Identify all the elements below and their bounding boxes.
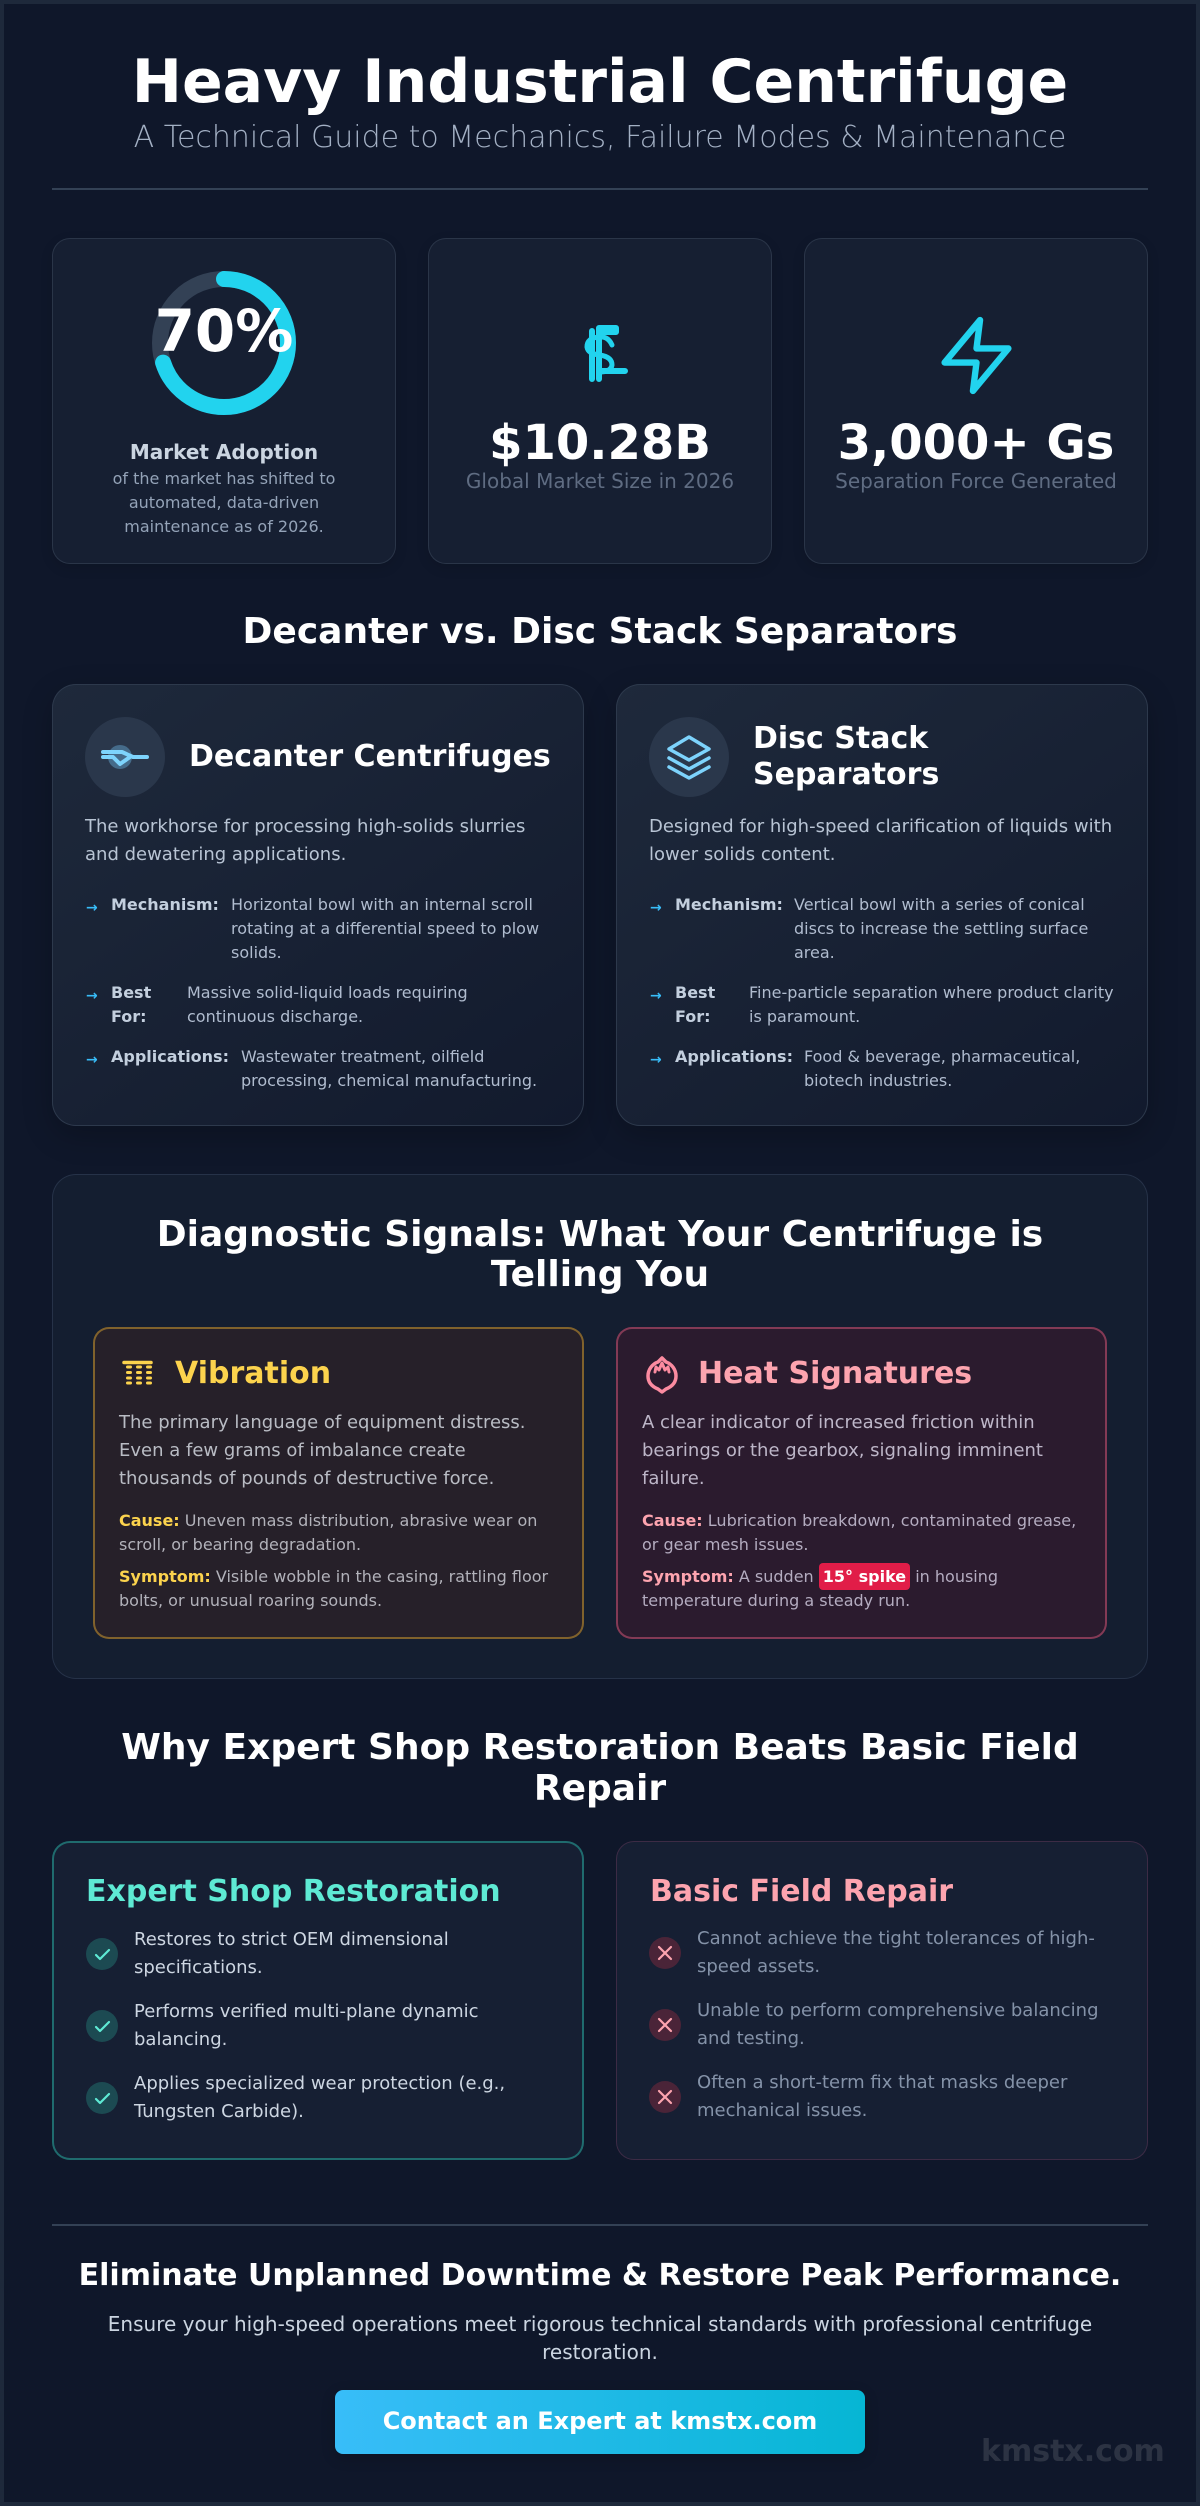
item text: Cannot achieve the tight tolerances of high- [697,1928,1095,1949]
arrow: → [86,900,98,916]
best for label: Best [675,983,715,1002]
best for label: For: [111,1007,147,1026]
watermark: kmstx.com [981,2434,1165,2469]
icon: cross [649,1937,681,1969]
stat description: of the market has shifted to [113,469,335,488]
stat value: 70%: 70% [155,297,293,365]
stat heading: Market Adoption [130,440,318,464]
item text: Restores to strict OEM dimensional [134,1929,449,1950]
applications text [241,1047,537,1090]
card description: and dewatering applications. [85,844,346,865]
best for label [675,983,715,1026]
best for text: continuous discharge. [187,1007,363,1026]
best for text: Massive solid-liquid loads requiring [187,983,468,1002]
item text: balancing. [134,2029,227,2050]
mechanism label: Mechanism: [675,895,783,914]
applications text: Wastewater treatment, oilfield [241,1047,484,1066]
card description: failure. [642,1468,705,1489]
cause: or gear mesh issues. [642,1535,808,1554]
cause [642,1511,1076,1554]
icon: vibration [122,1360,153,1384]
call to action text: Ensure your high-speed operations meet rigorous technical standards with professional centrifuge [108,2312,1092,2336]
heading: comparison: Decanter vs. Disc Stack Separators [243,611,957,652]
applications text: processing, chemical manufacturing. [241,1071,537,1090]
icon: flame [646,1356,678,1394]
symptom with highlight: temperature during a steady run. [642,1591,910,1610]
mechanism text: Horizontal bowl with an internal scroll [231,895,533,914]
icon: disc stack [649,717,729,797]
stat description: maintenance as of 2026. [124,517,324,536]
card: heat signatures [616,1327,1107,1639]
applications label: Applications: [675,1047,793,1066]
symptom: Symptom: Visible wobble in the casing, rattling floor [119,1567,548,1586]
symptom: bolts, or unusual roaring sounds. [119,1591,382,1610]
card description: thousands of pounds of destructive force. [119,1468,494,1489]
cause [119,1511,537,1554]
check item 1 [86,1929,449,1978]
panel: basic field repair [616,1841,1148,2160]
cross item 1 [649,1928,1095,1977]
item text [134,1929,449,1978]
best for label: Best [111,983,151,1002]
card description: Even a few grams of imbalance create [119,1440,466,1461]
panel: expert shop restoration [52,1841,584,2160]
card heading [753,721,939,792]
stat card: market size [428,238,772,564]
item text [697,2069,1067,2125]
best for text: Fine-particle separation where product clarity [749,983,1114,1002]
stat value: $10.28B [489,415,711,471]
icon: check [86,1938,118,1970]
panel heading: Basic Field Repair [650,1874,953,1909]
heading: shop vs field: Repair [534,1768,666,1809]
call to action text [0,2310,1200,2366]
stat card: market adoption [52,238,396,564]
icon: lightning bolt [941,316,1012,394]
panel: disc stack separators [616,684,1148,1126]
arrow: → [650,988,662,1004]
stat label: Global Market Size in 2026 [466,469,734,493]
card heading: Disc Stack [753,721,928,756]
card: vibration [93,1327,584,1639]
card description: The primary language of equipment distress. [119,1412,526,1433]
heading: diagnostic signals: Telling You [491,1254,709,1295]
cause: Cause: Lubrication breakdown, contaminated grease, [642,1511,1076,1530]
check item 2 [86,2001,479,2050]
item text: Tungsten Carbide). [134,2101,304,2122]
best for text [187,983,468,1026]
item text [697,2000,1099,2049]
applications label: Applications: [111,1047,229,1066]
item text: speed assets. [697,1956,820,1977]
icon: check [86,2010,118,2042]
card description: lower solids content. [649,844,836,865]
cross item 3 [649,2072,1068,2121]
card description [642,1412,1043,1489]
stat label: Separation Force Generated [835,469,1117,493]
applications text [804,1047,1080,1090]
icon: check [86,2082,118,2114]
item text: Unable to perform comprehensive balancing [697,2000,1099,2021]
card heading: Heat Signatures [698,1356,972,1391]
cause: scroll, or bearing degradation. [119,1535,361,1554]
best for label: For: [675,1007,711,1026]
stat description [113,469,335,536]
stat card: separation force [804,238,1148,564]
card description [649,816,1112,865]
card heading: Vibration [175,1356,331,1391]
icon: cross [649,2009,681,2041]
symptom with highlight: Symptom: A sudden 15° spike in housing [642,1567,998,1586]
card description [84,816,525,865]
cross item 2 [649,2000,1099,2049]
panel: decanter centrifuges [52,684,584,1126]
donut chart: 70 percent [152,271,296,415]
mechanism text: rotating at a differential speed to plow [231,919,539,938]
arrow: → [86,988,98,1004]
subtitle: A Technical Guide to Mechanics, Failure Modes & Maintenance [134,120,1066,155]
item text [697,1928,1095,1977]
icon: decanter [85,717,165,797]
heading: shop vs field [121,1727,1079,1809]
symptom [119,1567,548,1610]
item text: Applies specialized wear protection (e.g., [134,2073,505,2094]
mechanism text [231,895,539,962]
mechanism text [794,895,1088,962]
item text [134,2073,505,2122]
title: Heavy Industrial Centrifuge [132,47,1068,117]
item text [134,2001,479,2050]
card description: Designed for high-speed clarification of liquids with [649,816,1112,837]
stat value: 3,000+ Gs [838,415,1114,471]
item text: specifications. [134,1957,263,1978]
card description: A clear indicator of increased friction within [642,1412,1035,1433]
cause: Cause: Uneven mass distribution, abrasive wear on [119,1511,537,1530]
best for text [749,983,1114,1026]
arrow: → [650,1052,662,1068]
card description: bearings or the gearbox, signaling imminent [642,1440,1043,1461]
mechanism label: Mechanism: [111,895,219,914]
check item 3 [86,2073,505,2122]
call to action text: restoration. [542,2340,658,2364]
heading: diagnostic signals [157,1214,1043,1295]
icon: cross [649,2081,681,2113]
panel heading: Expert Shop Restoration [86,1874,501,1909]
item text: Often a short-term fix that masks deeper [697,2072,1067,2093]
heading: diagnostic signals: Diagnostic Signals: What Your Centrifuge is [157,1214,1043,1255]
best for label [111,983,151,1026]
heading: shop vs field: Why Expert Shop Restoration Beats Basic Field [121,1727,1079,1768]
item text: Performs verified multi-plane dynamic [134,2001,479,2022]
arrow: → [650,900,662,916]
panel: diagnostic signals [52,1174,1148,1679]
card heading: Separators [753,757,939,792]
best for text: is paramount. [749,1007,860,1026]
call to action heading: Eliminate Unplanned Downtime & Restore Peak Performance. [79,2258,1121,2293]
mechanism text: solids. [231,943,282,962]
card description: The workhorse for processing high-solids slurries [85,816,525,837]
item text: mechanical issues. [697,2100,867,2121]
stat description: automated, data-driven [129,493,319,512]
card heading: Decanter Centrifuges [189,739,551,774]
mechanism text: Vertical bowl with a series of conical [794,895,1085,914]
card description [118,1412,526,1489]
mechanism text: area. [794,943,835,962]
applications text: Food & beverage, pharmaceutical, [804,1047,1080,1066]
item text: and testing. [697,2028,805,2049]
arrow: → [86,1052,98,1068]
mechanism text: discs to increase the settling surface [794,919,1088,938]
button: contact: Contact an Expert at kmstx.com [383,2407,817,2435]
icon: dollar [584,325,628,382]
button: contact [335,2390,865,2454]
symptom with highlight [642,1563,998,1610]
applications text: biotech industries. [804,1071,952,1090]
